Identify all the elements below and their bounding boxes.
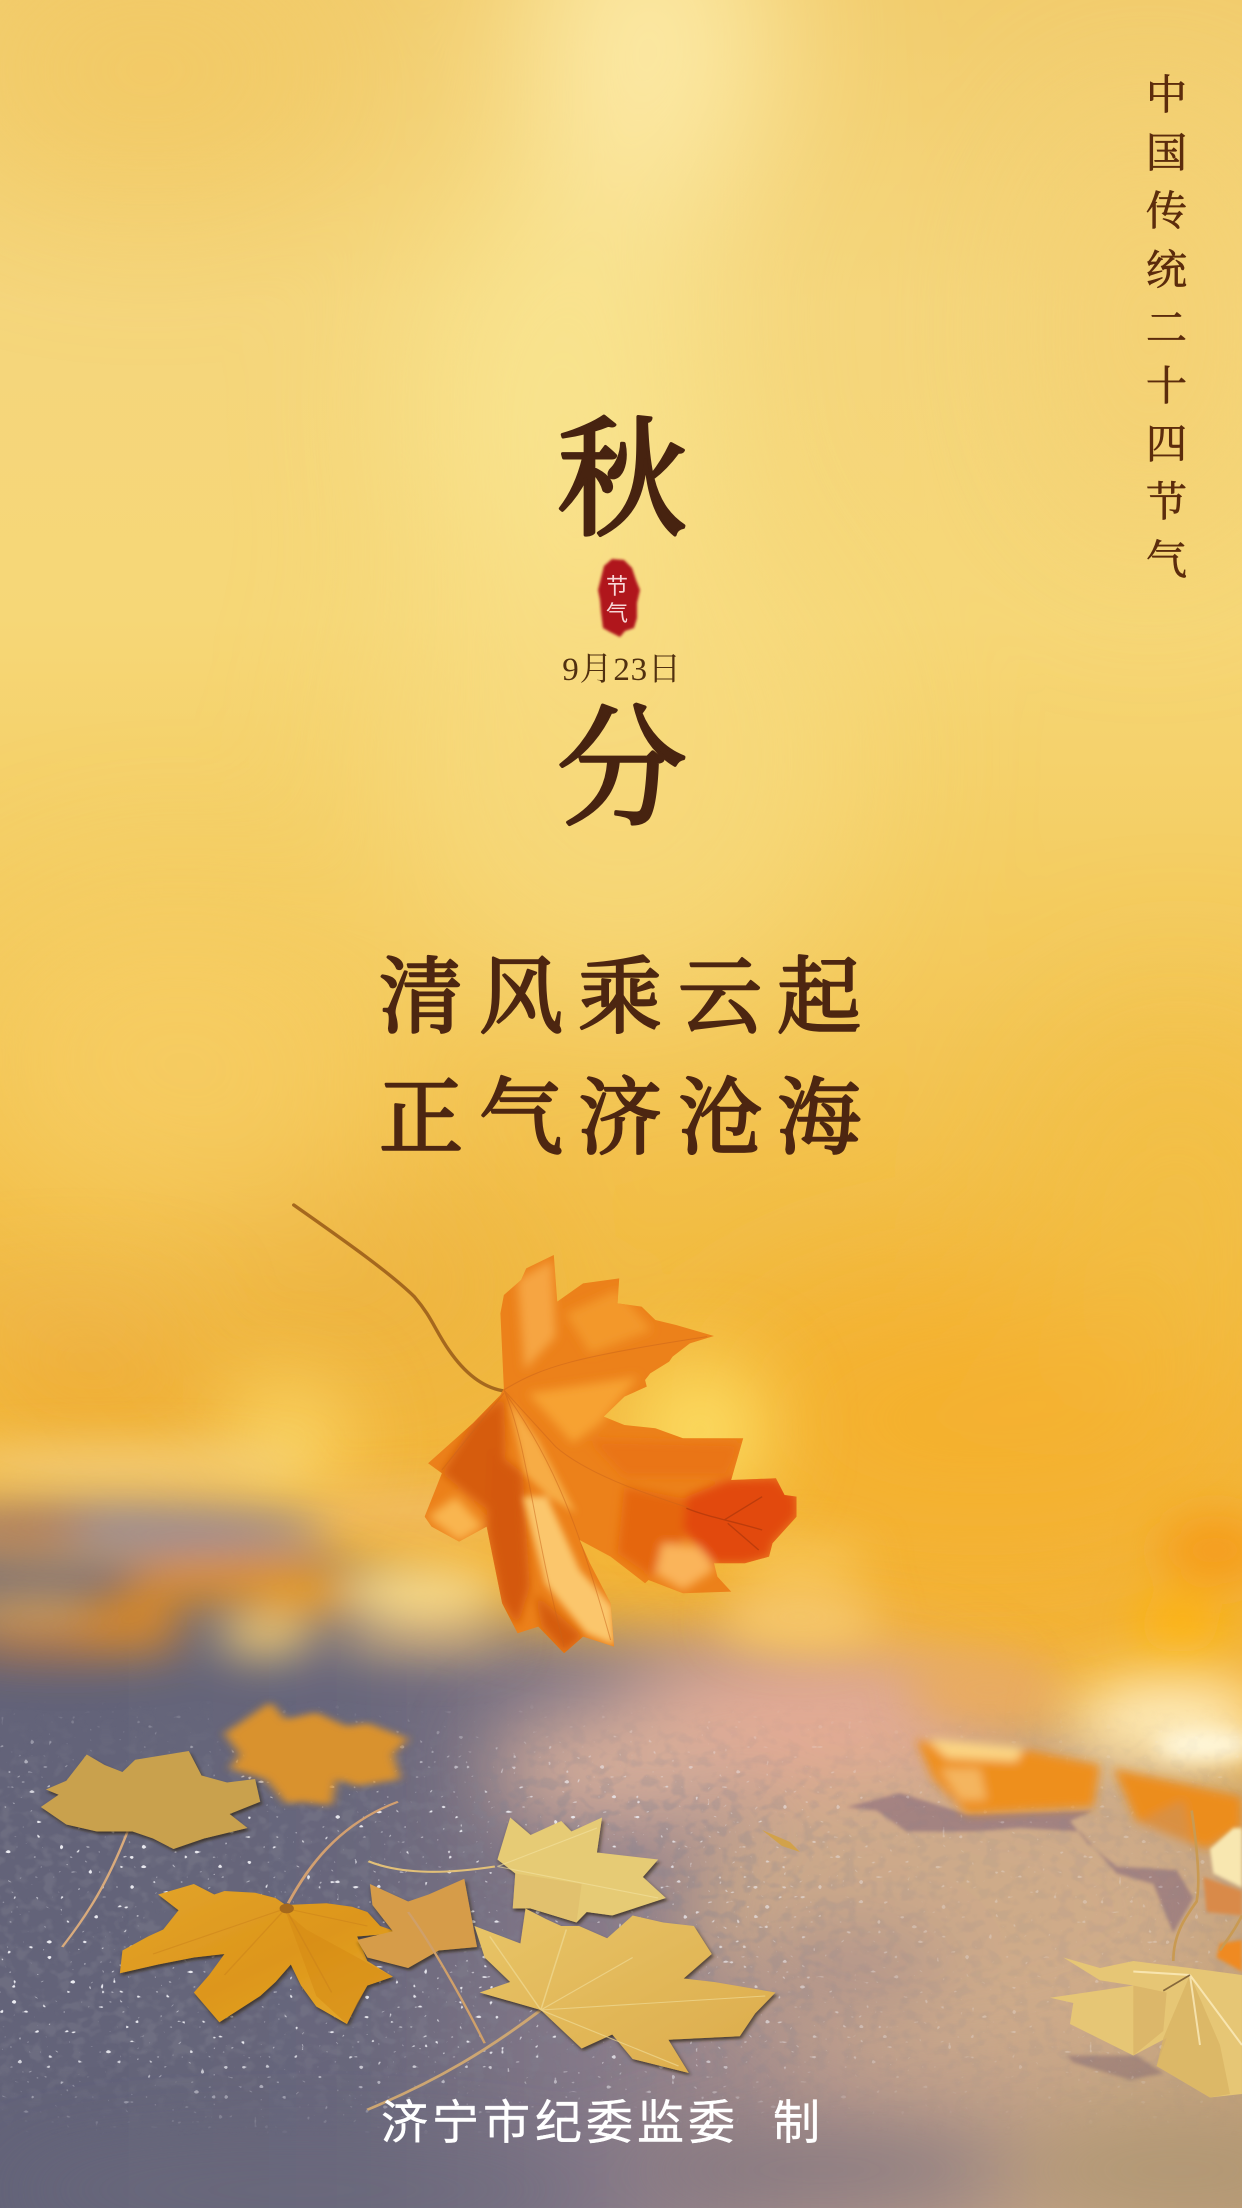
amber maple leaf with stem <box>120 1802 401 2024</box>
red seal with 节气: 节 <box>606 574 628 599</box>
pale leaf and twigs <box>1173 1810 1242 1972</box>
fallen leaves, lower left <box>41 1702 776 2110</box>
large yellow leaf with stem <box>367 1908 776 2110</box>
blurred amber leaf <box>224 1702 408 1805</box>
solar term title character: 分: 分 <box>557 665 687 852</box>
date: 9月23日 <box>562 652 682 688</box>
blurred orange leaves <box>917 1739 1242 1849</box>
vertical caption: 中国传统二十四节气 <box>1146 62 1187 586</box>
asphalt ground <box>0 1540 1242 2208</box>
small leaf, upper edge of the road <box>762 1830 800 1852</box>
tan orange leaf with stem <box>357 1879 485 2043</box>
pale yellow leaf with stem <box>368 1818 666 1922</box>
fallen leaves, lower right <box>917 1739 1242 2098</box>
slogan line two: 正气济沧海 <box>379 1051 861 1172</box>
solar term title character: 秋: 秋 <box>557 376 687 563</box>
red seal with 节气: 气 <box>606 601 628 626</box>
dry yellow leaf <box>1050 1958 1242 2098</box>
leaf blade <box>418 1247 803 1660</box>
sunlight and shadow patch on the ground, right <box>847 1793 1193 2080</box>
asphalt speckle texture <box>0 1708 1238 2128</box>
main falling maple leaf <box>294 1205 803 1660</box>
credit line: 济宁市纪委监委制 <box>381 2096 820 2149</box>
tan leaf with stem <box>41 1751 260 1947</box>
slogan line one: 清风乘云起 <box>379 930 861 1051</box>
blurred fallen leaves in the distance <box>0 1449 1242 1761</box>
red seal with 节气 <box>598 559 640 637</box>
stem <box>294 1205 502 1391</box>
